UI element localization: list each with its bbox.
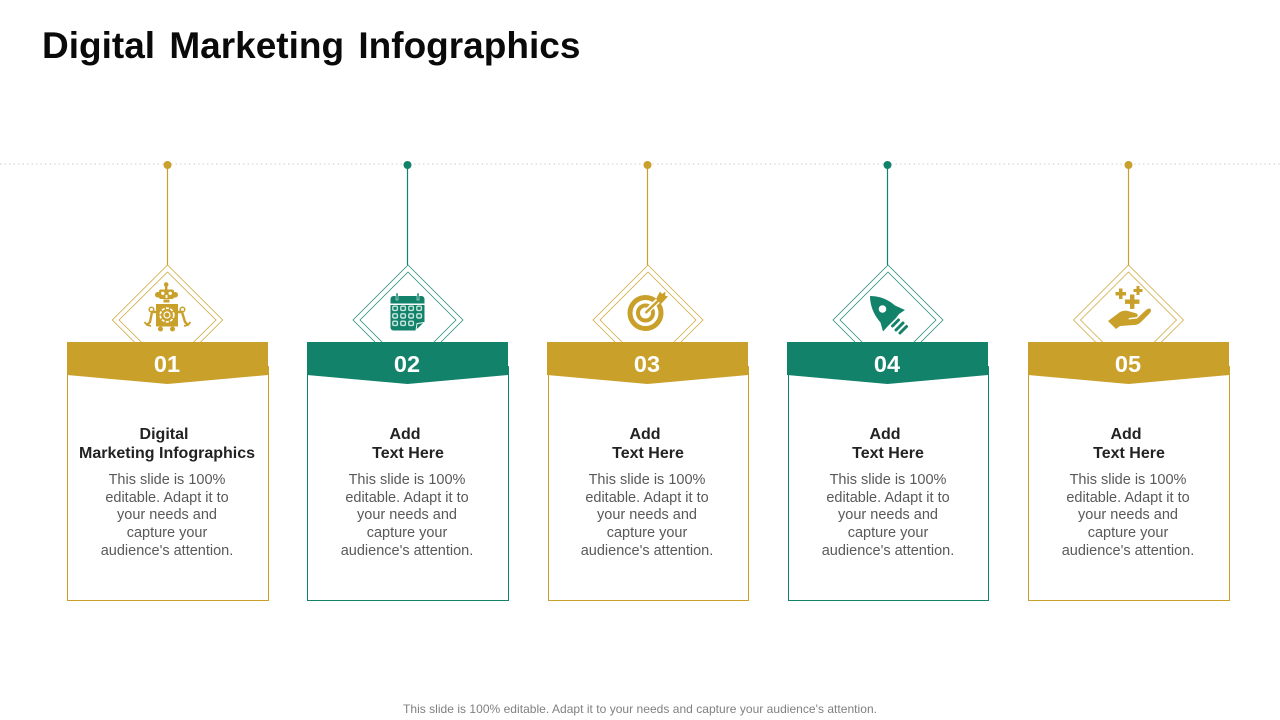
card heading: step 04: Add (869, 426, 901, 443)
banner: step 04: 04 (874, 351, 900, 377)
banner: step 03: 03 (634, 351, 660, 377)
card heading: step 02 (372, 426, 444, 462)
card text: step 03: audience's attention. (581, 543, 713, 559)
card text: step 01 (101, 472, 233, 559)
banner: step 02 (307, 342, 508, 384)
card text: step 02: editable. Adapt it to (345, 490, 469, 506)
connector: step 02 (404, 161, 412, 265)
card text: step 02: capture your (367, 525, 447, 541)
connector: step 05 (1124, 161, 1132, 265)
banner: step 01 (67, 342, 268, 384)
card text: step 04: editable. Adapt it to (826, 490, 950, 506)
card heading: step 03: Text Here (612, 445, 684, 462)
card text: step 05: This slide is 100% (1070, 472, 1187, 488)
panel: step 01 (67, 161, 268, 600)
card text: step 01: capture your (127, 525, 207, 541)
banner: step 04 (787, 342, 988, 384)
card text: step 01: This slide is 100% (109, 472, 226, 488)
connector: step 04 (884, 161, 892, 265)
card heading: step 05: Add (1110, 426, 1142, 443)
banner: step 05 (1028, 342, 1229, 384)
card text: step 02: This slide is 100% (349, 472, 466, 488)
panel: step 05 (1028, 161, 1230, 600)
card text: step 05: audience's attention. (1062, 543, 1194, 559)
card text: step 03: editable. Adapt it to (585, 490, 709, 506)
card text: step 04 (822, 472, 954, 559)
icon: robot (144, 282, 190, 332)
card heading: step 04: Text Here (852, 445, 924, 462)
panel: step 02 (307, 161, 508, 600)
card text: step 01: your needs and (117, 507, 217, 523)
card text: step 03: capture your (607, 525, 687, 541)
card heading: step 05: Text Here (1093, 445, 1165, 462)
card: step 05 (1028, 366, 1230, 600)
card heading: step 01: Marketing Infographics (79, 445, 255, 462)
panel: step 03 (547, 161, 748, 600)
card text: step 04: capture your (848, 525, 928, 541)
banner: step 05: 05 (1115, 351, 1141, 377)
card text: step 03: your needs and (597, 507, 697, 523)
card text: step 02 (341, 472, 473, 559)
footer note: This slide is 100% editable. Adapt it to your needs and capture your audience's attention. (403, 702, 877, 716)
card: step 02 (308, 366, 508, 600)
panel: step 04 (787, 161, 988, 600)
card text: step 05: capture your (1088, 525, 1168, 541)
icon: target with arrow (630, 292, 668, 328)
card text: step 01: editable. Adapt it to (105, 490, 229, 506)
card text: step 03: This slide is 100% (589, 472, 706, 488)
card heading: step 01: Digital (140, 426, 188, 443)
diamond frame: step 02 (353, 265, 463, 375)
banner: step 01: 01 (154, 351, 180, 377)
title: Digital Marketing Infographics (42, 25, 580, 66)
connector: step 03 (644, 161, 652, 265)
card text: step 05: editable. Adapt it to (1066, 490, 1190, 506)
card text: step 05 (1062, 472, 1194, 559)
card: step 03 (548, 366, 748, 600)
icon: calendar (390, 293, 424, 330)
card: step 04 (788, 366, 988, 600)
card heading: step 03: Add (629, 426, 661, 443)
card: step 01 (68, 366, 268, 600)
card text: step 05: your needs and (1078, 507, 1178, 523)
diamond frame: step 03 (593, 265, 703, 375)
diamond frame: step 05 (1074, 265, 1184, 375)
card text: step 04: your needs and (838, 507, 938, 523)
connector: step 01 (164, 161, 172, 265)
card text: step 04: audience's attention. (822, 543, 954, 559)
card text: step 04: This slide is 100% (830, 472, 947, 488)
card text: step 02: audience's attention. (341, 543, 473, 559)
icon: rocket (870, 296, 906, 333)
card text: step 03 (581, 472, 713, 559)
card text: step 02: your needs and (357, 507, 457, 523)
card heading: step 04 (852, 426, 924, 462)
card heading: step 02: Text Here (372, 445, 444, 462)
card heading: step 05 (1093, 426, 1165, 462)
banner: step 02: 02 (394, 351, 420, 377)
diamond frame: step 04 (833, 265, 943, 375)
icon: hand with sparkles (1108, 286, 1151, 329)
card heading: step 01 (79, 426, 255, 462)
card heading: step 02: Add (389, 426, 421, 443)
card text: step 01: audience's attention. (101, 543, 233, 559)
card heading: step 03 (612, 426, 684, 462)
diamond frame: step 01 (112, 265, 223, 375)
banner: step 03 (547, 342, 748, 384)
